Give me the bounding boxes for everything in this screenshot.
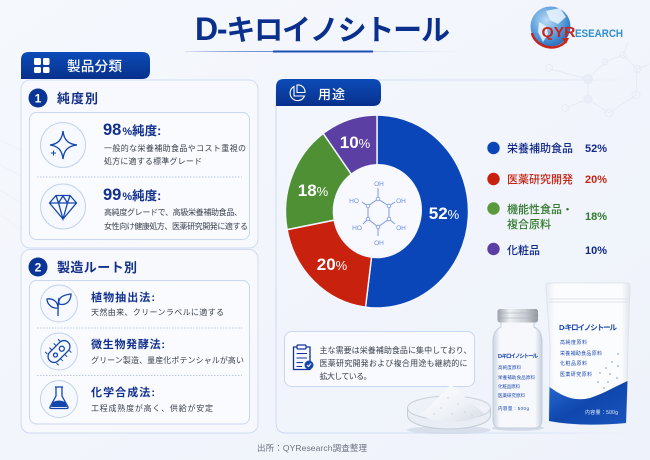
legend: pharma R&D	[487, 172, 607, 186]
pouch label text	[559, 323, 618, 416]
donut centre: molecule: OH	[396, 225, 406, 232]
heading: purity	[28, 88, 98, 108]
text: chemical synthesis: 工程成熟度が高く、供給が安定	[91, 403, 213, 413]
legend: cosmetics: 10%	[585, 245, 607, 257]
icon: clipboard	[294, 345, 314, 370]
text: 99% purity	[103, 186, 248, 231]
logo: QYResearch	[530, 6, 623, 47]
text: plant extraction: 天然由来、クリーンラベルに適する	[91, 307, 224, 317]
pouch label text: 化粧品原料	[560, 360, 587, 367]
icon: pie chart	[290, 85, 305, 101]
callout text: 主な需要は栄養補助食品に集中しており、	[320, 345, 472, 355]
donut centre: molecule: HO	[349, 198, 359, 205]
text: plant extraction: 植物抽出法:	[91, 290, 155, 304]
logo: QYResearch: ESEARCH	[575, 28, 623, 40]
text: plant extraction	[91, 290, 224, 317]
text: chemical synthesis	[91, 385, 213, 413]
panel: purity	[21, 80, 258, 248]
legend: pharma R&D: 医薬研究開発	[507, 172, 573, 186]
legend: cosmetics: 化粧品	[507, 244, 540, 257]
panel: applications	[276, 79, 640, 433]
legend: cosmetics	[487, 243, 607, 257]
logo: QYResearch: QYR	[542, 24, 576, 41]
heading: purity: 純度別	[57, 91, 98, 106]
product image: pouch	[546, 283, 630, 425]
donut centre: molecule: OH	[374, 240, 384, 247]
icon: sparkle	[40, 122, 86, 168]
route list box	[30, 280, 250, 424]
callout	[284, 332, 474, 386]
legend: functional food: 18%	[585, 211, 607, 223]
legend: functional food: 複合原料	[507, 217, 551, 231]
donut value labels: 20%	[317, 255, 348, 274]
legend: functional food: 機能性食品・	[507, 202, 573, 216]
icon: four squares	[34, 58, 50, 73]
donut chart	[286, 115, 468, 308]
donut centre: molecule	[334, 164, 422, 256]
heading: manufacturing route: 2	[35, 260, 42, 274]
bottle label text: D-キロイノシトール	[498, 353, 538, 360]
title: D-キロイノシトール	[195, 11, 450, 47]
legend: nutritional supplements	[487, 141, 607, 155]
tab: applications	[276, 79, 381, 106]
legend: nutritional supplements: 栄養補助食品	[507, 141, 573, 155]
text: 99% purity: 女性向け健康処方、医薬研究開発に適する	[104, 221, 248, 231]
bottle label text: 医薬研究原料	[498, 392, 526, 399]
donut centre: molecule: OH	[396, 198, 406, 205]
text: microbial fermentation	[91, 337, 244, 365]
text: 98% purity: 一般的な栄養補助食品やコスト重視の	[104, 143, 246, 153]
pouch label text: 高純度原料	[560, 339, 587, 346]
bottle label text: 内容量：500g	[498, 405, 529, 412]
pouch label text: 内容量：500g	[585, 409, 618, 416]
text: microbial fermentation: グリーン製造、量産化ポテンシャルが高い	[91, 355, 244, 365]
text: 98% purity: 処方に適する標準グレード	[104, 156, 202, 166]
text: 99% purity: 高純度グレードで、高級栄養補助食品、	[104, 207, 242, 217]
text: 98% purity: 98%純度:	[103, 121, 161, 139]
text: chemical synthesis: 化学合成法:	[91, 385, 155, 399]
donut value labels	[298, 133, 460, 274]
callout text: 拡大している。	[320, 371, 372, 381]
text: 98% purity	[103, 121, 246, 166]
purity list box	[30, 112, 250, 240]
donut centre: molecule: OH	[374, 181, 384, 188]
icon: plant	[40, 285, 78, 322]
text: 99% purity: 99%純度:	[103, 186, 161, 204]
product image: powder dish	[407, 385, 491, 434]
pouch label text: D-キロイノシトール	[559, 323, 618, 332]
legend: pharma R&D: 20%	[585, 174, 607, 186]
icon: microbe	[40, 333, 78, 370]
icon: diamond	[40, 184, 86, 229]
bottle label text	[498, 353, 538, 412]
panel: product classification tab	[21, 52, 150, 79]
legend	[487, 141, 607, 257]
donut value labels: 18%	[298, 181, 329, 200]
donut centre: molecule: HO	[352, 225, 362, 232]
heading: manufacturing route	[28, 258, 137, 276]
donut value labels: 10%	[340, 133, 371, 152]
heading: purity: 1	[35, 92, 42, 106]
pouch label text: 医薬研究原料	[560, 371, 592, 378]
bottle label text: 栄養補助食品原料	[498, 374, 536, 381]
legend: nutritional supplements: 52%	[585, 143, 607, 155]
tab: applications: 用途	[318, 87, 345, 102]
bottle label text: 化粧品原料	[498, 383, 520, 390]
panel: product classification tab: 製品分類	[67, 59, 122, 74]
source note: 出所：QYResearch調査整理	[257, 443, 367, 453]
icon: flask	[40, 380, 78, 418]
bottle label text: 高純度原料	[498, 364, 522, 371]
callout text	[320, 345, 472, 381]
text: microbial fermentation: 微生物発酵法:	[91, 337, 165, 351]
donut value labels: 52%	[429, 204, 460, 223]
pouch label text: 栄養補助食品原料	[560, 350, 602, 357]
legend: functional food	[487, 202, 607, 231]
panel: manufacturing route	[21, 250, 258, 433]
callout text: 医薬研究開発および複合用途も継続的に	[320, 358, 468, 368]
product image: bottle	[492, 309, 544, 431]
heading: manufacturing route: 製造ルート別	[57, 260, 137, 275]
